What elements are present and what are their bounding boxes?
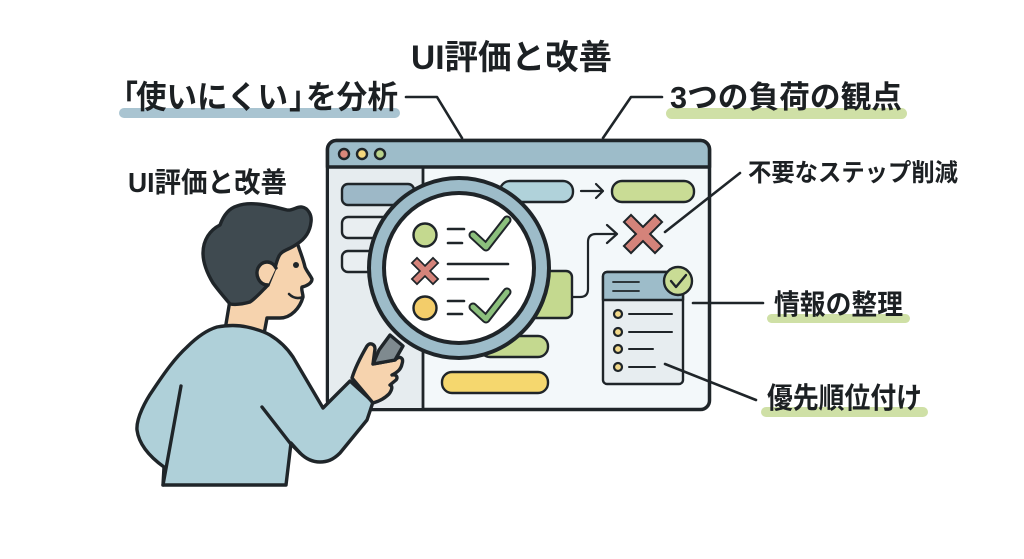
label: prioritization: 優先順位付け xyxy=(767,382,922,415)
lens rim xyxy=(369,178,549,358)
magnifier xyxy=(352,178,549,403)
arrow: block to removed step xyxy=(572,225,617,297)
flow pill: green step xyxy=(612,181,694,202)
leader line: removed step xyxy=(665,173,740,232)
label: person caption: UI評価と改善 xyxy=(128,167,287,198)
title bar xyxy=(328,140,710,167)
arrow: blue step to green step xyxy=(581,184,603,198)
eye xyxy=(293,262,299,268)
list card xyxy=(603,267,692,384)
flow box: green block xyxy=(515,271,572,318)
arm fold xyxy=(262,407,300,453)
leader line: priority xyxy=(665,364,756,400)
lens glass xyxy=(384,193,534,343)
label: organize information: 情報の整理 xyxy=(774,289,903,320)
flow pill: yellow xyxy=(442,372,548,393)
body and sleeve xyxy=(137,326,373,485)
check row 2 xyxy=(414,292,507,320)
browser window xyxy=(137,140,958,485)
sidebar divider xyxy=(422,167,424,409)
person xyxy=(137,204,373,485)
leader line: left heading to window xyxy=(406,97,462,138)
icon: big cross xyxy=(631,222,655,246)
icon: card check badge xyxy=(664,267,692,295)
heading: analyze hard to use: 使いにくい xyxy=(136,79,288,115)
heading: analyze hard to use: 「 xyxy=(108,79,138,115)
cross row xyxy=(417,263,508,279)
card bullets xyxy=(614,310,622,371)
leader line: info xyxy=(693,302,763,304)
label: remove steps: 不要なステップ削減 xyxy=(748,159,958,187)
card list lines xyxy=(629,314,672,367)
neck and face xyxy=(225,242,312,334)
leader line: right heading to window xyxy=(603,97,662,138)
handle xyxy=(373,335,403,364)
sidebar xyxy=(329,167,423,408)
hair xyxy=(203,204,311,304)
heading: analyze hard to use: を分析 xyxy=(306,79,398,115)
flow pill: blue step xyxy=(500,181,573,202)
card header xyxy=(603,272,683,300)
title: UI評価と改善 xyxy=(411,39,612,77)
heading: analyze hard to use xyxy=(108,79,400,118)
smile xyxy=(289,294,303,298)
hand xyxy=(352,344,403,403)
check row 1 xyxy=(414,220,507,247)
ear xyxy=(257,262,276,285)
card header lines xyxy=(613,282,639,291)
back fold xyxy=(163,386,181,485)
window dots xyxy=(339,149,385,159)
flow pill: lower green xyxy=(480,336,548,357)
heading: three load viewpoints: 3つの負荷の観点 xyxy=(670,80,902,115)
sidebar items xyxy=(342,184,414,272)
heading: analyze hard to use: 」 xyxy=(289,79,319,115)
